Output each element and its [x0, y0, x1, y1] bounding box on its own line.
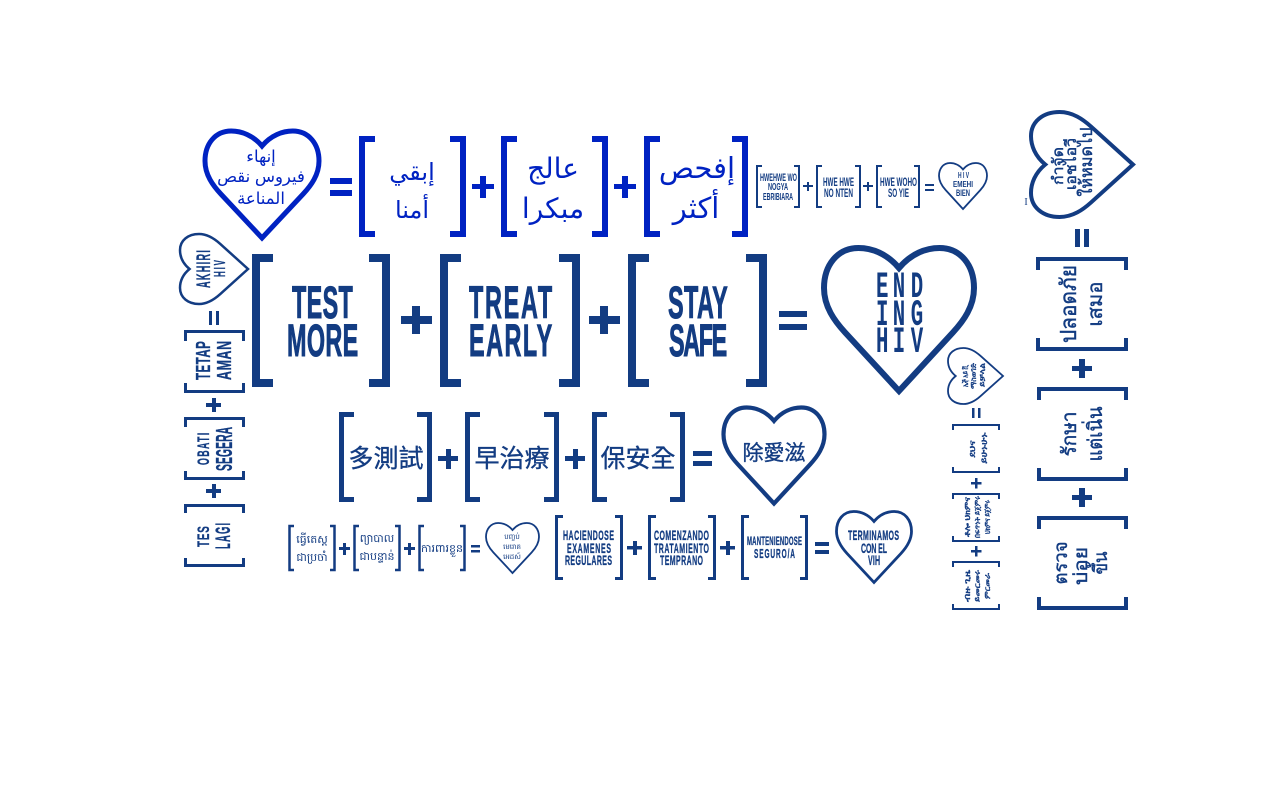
bracket: haciendose examenes regulares: REGULARES — [565, 554, 612, 569]
bracket: treat early Arabic — [504, 139, 605, 234]
heart: Amharic: ይቻላል — [978, 363, 987, 387]
bracket: treat early: EARLY — [469, 316, 552, 366]
panel: Khmer equation — [290, 523, 539, 573]
bracket: Thai treat early: รักษา — [1059, 412, 1081, 456]
bracket: Amharic 3: ምርመራ — [983, 573, 992, 599]
small letter mark: I — [1024, 197, 1028, 208]
bracket: comenzando tratamiento temprano: TEMPRANO — [660, 554, 703, 569]
bracket: Thai stay safe — [1038, 259, 1126, 349]
heart: Akan: EMEHI — [953, 180, 973, 189]
bracket: Thai test more: บ่อย — [1071, 547, 1092, 585]
bracket: Amharic 1 — [953, 425, 999, 472]
heart: Thai: ให้หมดไป — [1076, 128, 1096, 196]
plus — [971, 478, 982, 488]
heart: terminamos con el VIH: CON EL — [861, 542, 887, 557]
equals sign — [779, 311, 807, 330]
heart: Arabic ending HIV: فيروس نقص — [217, 168, 305, 187]
bracket: stay safe Chinese: 保安全 — [600, 445, 676, 473]
bracket: Akan 2: NO NTEN — [824, 186, 853, 200]
bracket: Thai test more — [1039, 518, 1126, 608]
bracket: Akan 2 — [817, 166, 860, 207]
panel: Chinese equation — [342, 408, 824, 504]
heart: terminamos con el VIH — [836, 512, 912, 582]
bracket: stay safe: SAFE — [669, 316, 727, 366]
plus — [627, 541, 642, 555]
bracket: Tetap aman — [186, 332, 244, 392]
bracket: Obati segera: SEGERA — [211, 427, 237, 471]
heart: Khmer — [486, 523, 539, 573]
bracket: Akan 3: SO YIE — [888, 186, 909, 200]
plus — [565, 449, 585, 469]
bracket: Khmer 1 — [290, 526, 334, 570]
panel: Arabic equation — [205, 131, 745, 238]
heart: Chinese ending HIV: 除愛滋 — [742, 442, 806, 465]
bracket: Amharic 1: ይሁኑሁኑ — [979, 432, 989, 464]
panel: English main equation — [256, 248, 974, 391]
heart: Khmer: មេរោគ — [503, 544, 521, 551]
plus — [1072, 488, 1092, 507]
bracket: Thai treat early: แต่เนิ่น — [1081, 406, 1107, 462]
panel: Akan equation — [757, 163, 987, 209]
bracket: comenzando tratamiento temprano: TRATAMIENTO — [654, 542, 709, 557]
bracket: Amharic 2: ቶሎ ህክምና — [963, 496, 972, 537]
heart: Arabic ending HIV: إنهاء — [246, 148, 276, 167]
bracket: treat early: TREAT — [469, 278, 552, 328]
heart: Thai: กำจัด — [1050, 147, 1067, 185]
bracket: Thai test more: ตรวจ — [1051, 542, 1072, 584]
heart: Khmer: បញ្ចប់ — [504, 532, 520, 541]
equals sign — [209, 311, 219, 325]
equals sign — [471, 545, 480, 552]
panel: Indonesian equation (rotated) — [180, 234, 248, 566]
bracket: Tetap aman: TETAP — [193, 341, 215, 380]
heart: ending HIV: END — [876, 267, 923, 309]
heart: Amharic: ኤች አይ ቪ — [961, 365, 970, 387]
equals sign — [972, 408, 980, 418]
bracket: Khmer 3: ការពារខ្លួន — [421, 543, 463, 557]
heart: Arabic ending HIV: المناعة — [237, 190, 285, 208]
plus — [339, 543, 350, 555]
bracket: Akan 3 — [877, 166, 919, 207]
bracket: test more Chinese: 多測試 — [348, 445, 424, 473]
bracket: Amharic 2: ህክምና ይጀምሩ — [983, 500, 992, 534]
bracket: stay safe: STAY — [668, 278, 728, 328]
plus — [803, 182, 813, 191]
plus — [206, 398, 221, 412]
bracket: treat early Arabic: مبكرا — [522, 193, 584, 225]
bracket: test more Arabic — [647, 139, 745, 234]
heart: Amharic: ማስወገድ — [969, 363, 978, 389]
bracket: Amharic 3 — [953, 562, 999, 609]
bracket: Thai treat early — [1039, 389, 1126, 479]
bracket: Khmer 1: ធ្វើតេស្ត — [296, 532, 328, 546]
plus — [720, 541, 735, 555]
bracket: Khmer 3 — [420, 526, 464, 570]
bracket: test more Arabic: أكثر — [671, 188, 719, 225]
heart: Amharic — [948, 348, 1003, 404]
bracket: treat early Arabic: عالج — [527, 153, 579, 185]
bracket: haciendose examenes regulares: EXAMENES — [567, 542, 611, 557]
heart: Akhiri HIV: HIV — [211, 260, 229, 277]
equals sign — [1075, 229, 1089, 247]
heart: Akan — [939, 163, 987, 209]
bracket: Khmer 2: ព្យាបាល — [360, 533, 394, 545]
heart: Chinese ending HIV — [724, 408, 824, 504]
bracket: Khmer 1: ជាប្រចាំ — [296, 550, 328, 564]
bracket: manteniendose seguro/a — [742, 516, 806, 578]
bracket: stay safe — [632, 258, 763, 383]
bracket: Tetap aman: AMAN — [213, 341, 236, 380]
heart: Akan: H I V — [958, 171, 969, 180]
bracket: Thai stay safe: ปลอดภัย — [1056, 265, 1081, 343]
bracket: stay safe Chinese — [594, 414, 682, 500]
bracket: stay safe Arabic: أمنا — [395, 194, 429, 224]
equals sign — [925, 184, 934, 191]
bracket: Akan 1: EBRIBIARA — [763, 192, 793, 203]
heart: Thai: เอชไอวี — [1062, 138, 1080, 190]
bracket: test more: TEST — [292, 278, 353, 328]
heart: Akan: BIEN — [956, 188, 970, 198]
bracket: Amharic 3: ብዙ ጊዜ — [963, 569, 972, 602]
bracket: Tes lagi: TES — [193, 526, 213, 547]
heart: Arabic ending HIV — [205, 131, 319, 238]
plus — [1072, 359, 1092, 378]
heart: terminamos con el VIH: VIH — [868, 554, 880, 569]
bracket: treat early Chinese — [468, 414, 556, 500]
bracket: comenzando tratamiento temprano: COMENZANDO — [654, 529, 709, 544]
plus — [404, 543, 415, 555]
bracket: Amharic 2: በፍጥነት ይጀምሩ — [973, 496, 982, 538]
bracket: Akan 1: HWEHWE WO — [760, 172, 797, 184]
bracket: Obati segera — [186, 418, 244, 478]
plus — [614, 176, 636, 198]
plus — [589, 306, 620, 334]
heart: ending HIV — [824, 248, 974, 391]
bracket: Amharic 3: ይመርመሩ — [973, 570, 982, 602]
bracket: Tes lagi: LAGI — [212, 523, 235, 549]
heart: Akhiri HIV — [180, 234, 248, 304]
bracket: comenzando tratamiento temprano — [650, 516, 714, 578]
heart: Thai — [1031, 112, 1133, 217]
bracket: test more — [256, 258, 386, 383]
bracket: Tes lagi — [186, 506, 244, 566]
heart: Khmer: អេដស៍ — [503, 552, 521, 561]
bracket: treat early Chinese: 早治療 — [474, 445, 550, 473]
equals sign — [815, 542, 829, 554]
heart: Akhiri HIV: AKHIRI — [195, 250, 215, 288]
plus — [206, 484, 221, 498]
plus — [472, 176, 494, 198]
bracket: test more Chinese — [342, 414, 430, 500]
bracket: manteniendose seguro/a: MANTENIENDOSE — [747, 535, 802, 549]
plus — [863, 182, 873, 191]
panel: Amharic equation (rotated) — [948, 348, 1003, 609]
plus — [401, 306, 432, 334]
heart: terminamos con el VIH: TERMINAMOS — [848, 529, 899, 544]
panel: Thai equation (rotated) — [1024, 112, 1133, 608]
bracket: Khmer 2 — [354, 526, 400, 570]
bracket: Amharic 2 — [953, 494, 999, 541]
bracket: test more: MORE — [287, 316, 358, 366]
equals sign — [693, 451, 712, 466]
bracket: Akan 1: NOGYA — [768, 182, 788, 193]
bracket: stay safe Arabic — [362, 139, 463, 234]
heart: ending HIV: HIV — [876, 322, 923, 364]
plus — [438, 449, 458, 469]
bracket: treat early — [444, 258, 576, 383]
bracket: haciendose examenes regulares: HACIENDOSE — [563, 529, 614, 544]
bracket: Thai stay safe: เสมอ — [1085, 282, 1107, 326]
bracket: haciendose examenes regulares — [556, 516, 622, 578]
equals sign — [330, 178, 352, 196]
bracket: Akan 2: HWE HWE — [823, 175, 854, 189]
bracket: manteniendose seguro/a: SEGURO/A — [754, 548, 795, 562]
bracket: Amharic 1: ደህና — [968, 440, 977, 458]
bracket: stay safe Arabic: إبقي — [389, 159, 435, 187]
bracket: Thai test more: ขึ้น — [1087, 551, 1112, 574]
heart: ending HIV: ING — [876, 295, 923, 337]
bracket: test more Arabic: إفحص — [659, 153, 735, 186]
bracket: Obati segera: OBATI — [194, 433, 213, 465]
bracket: Akan 3: HWE WOHO — [880, 175, 917, 189]
bracket: Khmer 2: ជាបន្ទាន់ — [360, 549, 394, 563]
bracket: Akan 1 — [757, 166, 799, 207]
panel: Spanish equation — [556, 512, 912, 582]
plus — [971, 546, 982, 556]
